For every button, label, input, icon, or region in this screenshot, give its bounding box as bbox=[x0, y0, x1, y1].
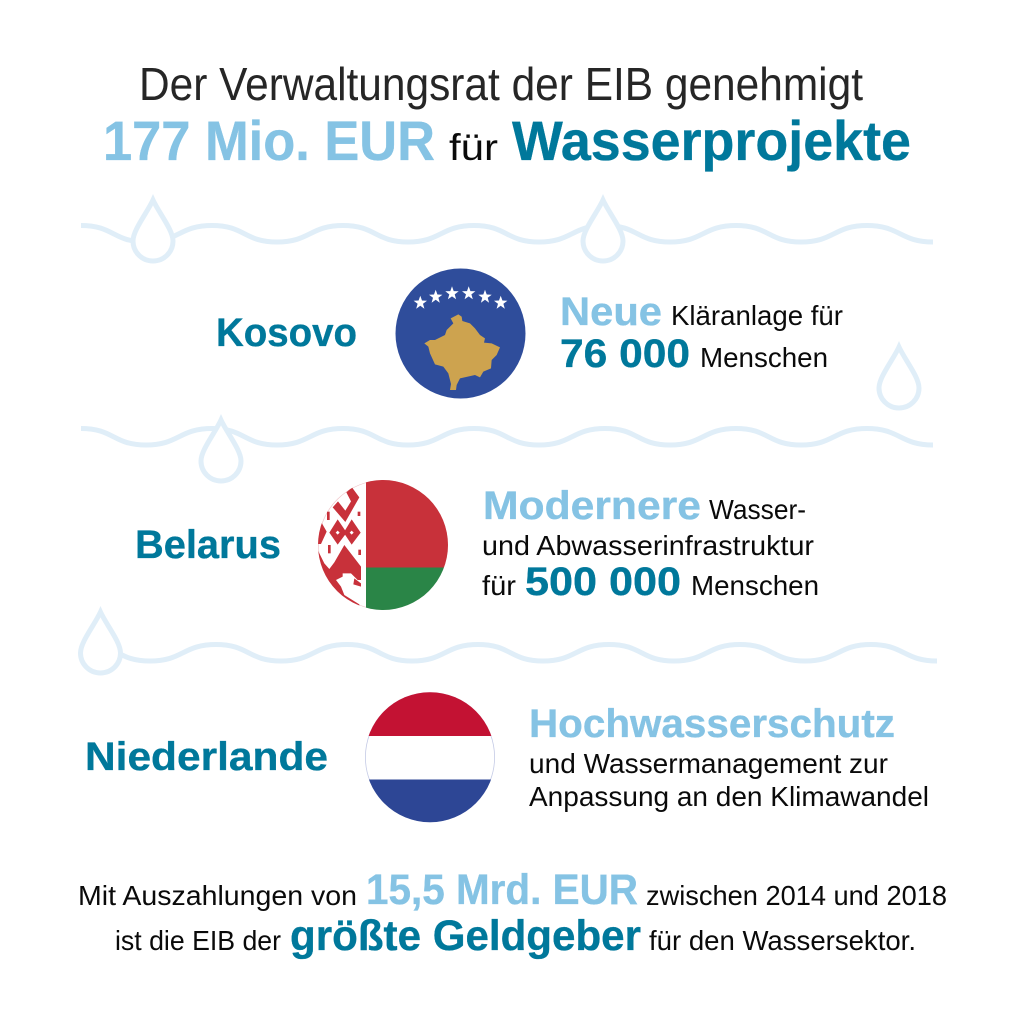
footer statement: 15,5 Mrd. EUR bbox=[366, 866, 638, 914]
description: Niederlande bbox=[529, 702, 929, 812]
country name: Niederlande: Niederlande bbox=[85, 735, 328, 779]
description: Belarus: 500 000 bbox=[525, 560, 681, 604]
description: Belarus: für bbox=[482, 570, 516, 601]
footer statement: größte Geldgeber bbox=[290, 912, 641, 960]
description: Belarus: Menschen bbox=[691, 570, 819, 601]
description: Belarus: Wasser- bbox=[709, 494, 806, 525]
footer statement: für den Wassersektor. bbox=[649, 925, 916, 956]
title: für bbox=[449, 127, 498, 168]
footer statement bbox=[78, 866, 947, 960]
description: Niederlande: Hochwasserschutz bbox=[529, 702, 895, 746]
description: Kosovo: Kläranlage für bbox=[671, 300, 843, 331]
title: Wasserprojekte bbox=[512, 109, 911, 172]
flag: Niederlande bbox=[365, 692, 495, 824]
panel: Kosovo bbox=[216, 268, 843, 398]
description: Kosovo: 76 000 bbox=[560, 332, 690, 376]
description: Kosovo bbox=[560, 290, 843, 376]
description: Belarus: Modernere bbox=[483, 484, 701, 528]
description: Belarus bbox=[482, 484, 819, 604]
title: 177 Mio. EUR bbox=[103, 109, 435, 172]
flag: Belarus bbox=[316, 480, 448, 612]
description: Belarus: und Abwasserinfrastruktur bbox=[482, 530, 814, 561]
flag: Kosovo bbox=[396, 268, 526, 398]
description: Niederlande: Anpassung an den Klimawandel bbox=[529, 781, 929, 812]
title bbox=[103, 58, 911, 172]
footer statement: ist die EIB der bbox=[115, 925, 281, 956]
description: Niederlande: und Wassermanagement zur bbox=[529, 748, 888, 779]
panel: Niederlande bbox=[85, 692, 929, 824]
decorative waves and water drops bbox=[80, 200, 937, 673]
title: Der Verwaltungsrat der EIB genehmigt bbox=[139, 58, 863, 110]
panel: Belarus bbox=[135, 480, 819, 612]
description: Kosovo: Neue bbox=[560, 290, 662, 334]
footer statement: zwischen 2014 und 2018 bbox=[646, 880, 947, 911]
description: Kosovo: Menschen bbox=[700, 342, 828, 373]
country name: Belarus: Belarus bbox=[135, 523, 281, 567]
footer statement: Mit Auszahlungen von bbox=[78, 880, 357, 911]
country name: Kosovo: Kosovo bbox=[216, 311, 357, 355]
